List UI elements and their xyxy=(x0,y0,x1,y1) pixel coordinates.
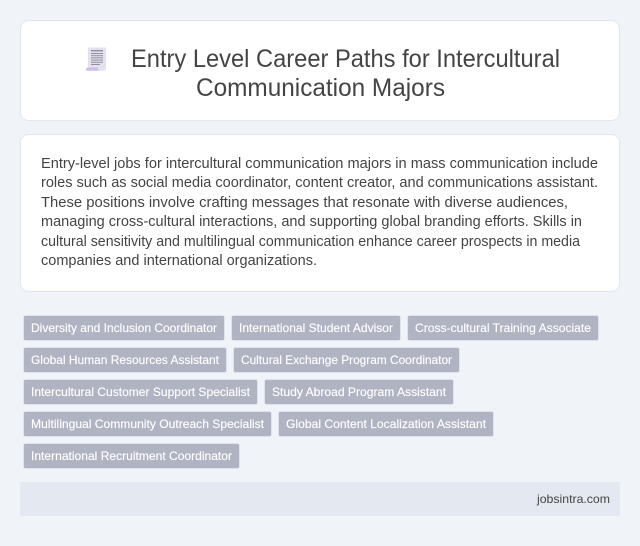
tag xyxy=(264,380,454,404)
tag: Intercultural Customer Support Specialist xyxy=(31,385,251,399)
tag xyxy=(408,316,598,340)
text block: description: managing cross-cultural interactions, and supporting global branding efforts. Skills in xyxy=(41,213,582,230)
title: Communication Majors xyxy=(196,74,445,102)
text block: description: Entry-level jobs for intercultural communication majors in mass communication include xyxy=(41,155,598,172)
tag xyxy=(24,412,272,436)
tag: Multilingual Community Outreach Specialist xyxy=(31,417,265,431)
tag xyxy=(278,412,494,436)
tag xyxy=(24,316,224,340)
tag: Global Human Resources Assistant xyxy=(31,353,220,367)
tag xyxy=(24,348,226,372)
tag xyxy=(234,348,460,372)
tag: International Student Advisor xyxy=(239,321,393,335)
footer xyxy=(20,482,620,516)
text block: description xyxy=(41,155,598,269)
tag: Global Content Localization Assistant xyxy=(286,417,487,431)
tag xyxy=(24,380,258,404)
tag xyxy=(24,444,240,468)
icon: document scroll xyxy=(86,48,106,71)
title xyxy=(131,45,560,102)
tag: Study Abroad Program Assistant xyxy=(272,385,447,399)
text block: description: roles such as social media coordinator, content creator, and communications assistant. xyxy=(41,174,598,191)
tag: Cross-cultural Training Associate xyxy=(415,321,591,335)
tag: International Recruitment Coordinator xyxy=(31,449,232,463)
tag list xyxy=(24,316,598,468)
text block: description: cultural sensitivity and multilingual communication enhance career prospects in media xyxy=(41,233,581,250)
tag: Diversity and Inclusion Coordinator xyxy=(31,321,217,335)
title: Entry Level Career Paths for Intercultural xyxy=(131,45,560,73)
footer source text: jobsintra.com xyxy=(536,492,610,506)
text block: description: companies and international organizations. xyxy=(41,252,317,269)
panel: header xyxy=(20,20,620,120)
text block: description: These positions involve crafting messages that resonate with diverse audiences, xyxy=(41,194,568,211)
panel: description xyxy=(20,134,620,292)
tag: Cultural Exchange Program Coordinator xyxy=(241,353,452,367)
tag xyxy=(232,316,400,340)
